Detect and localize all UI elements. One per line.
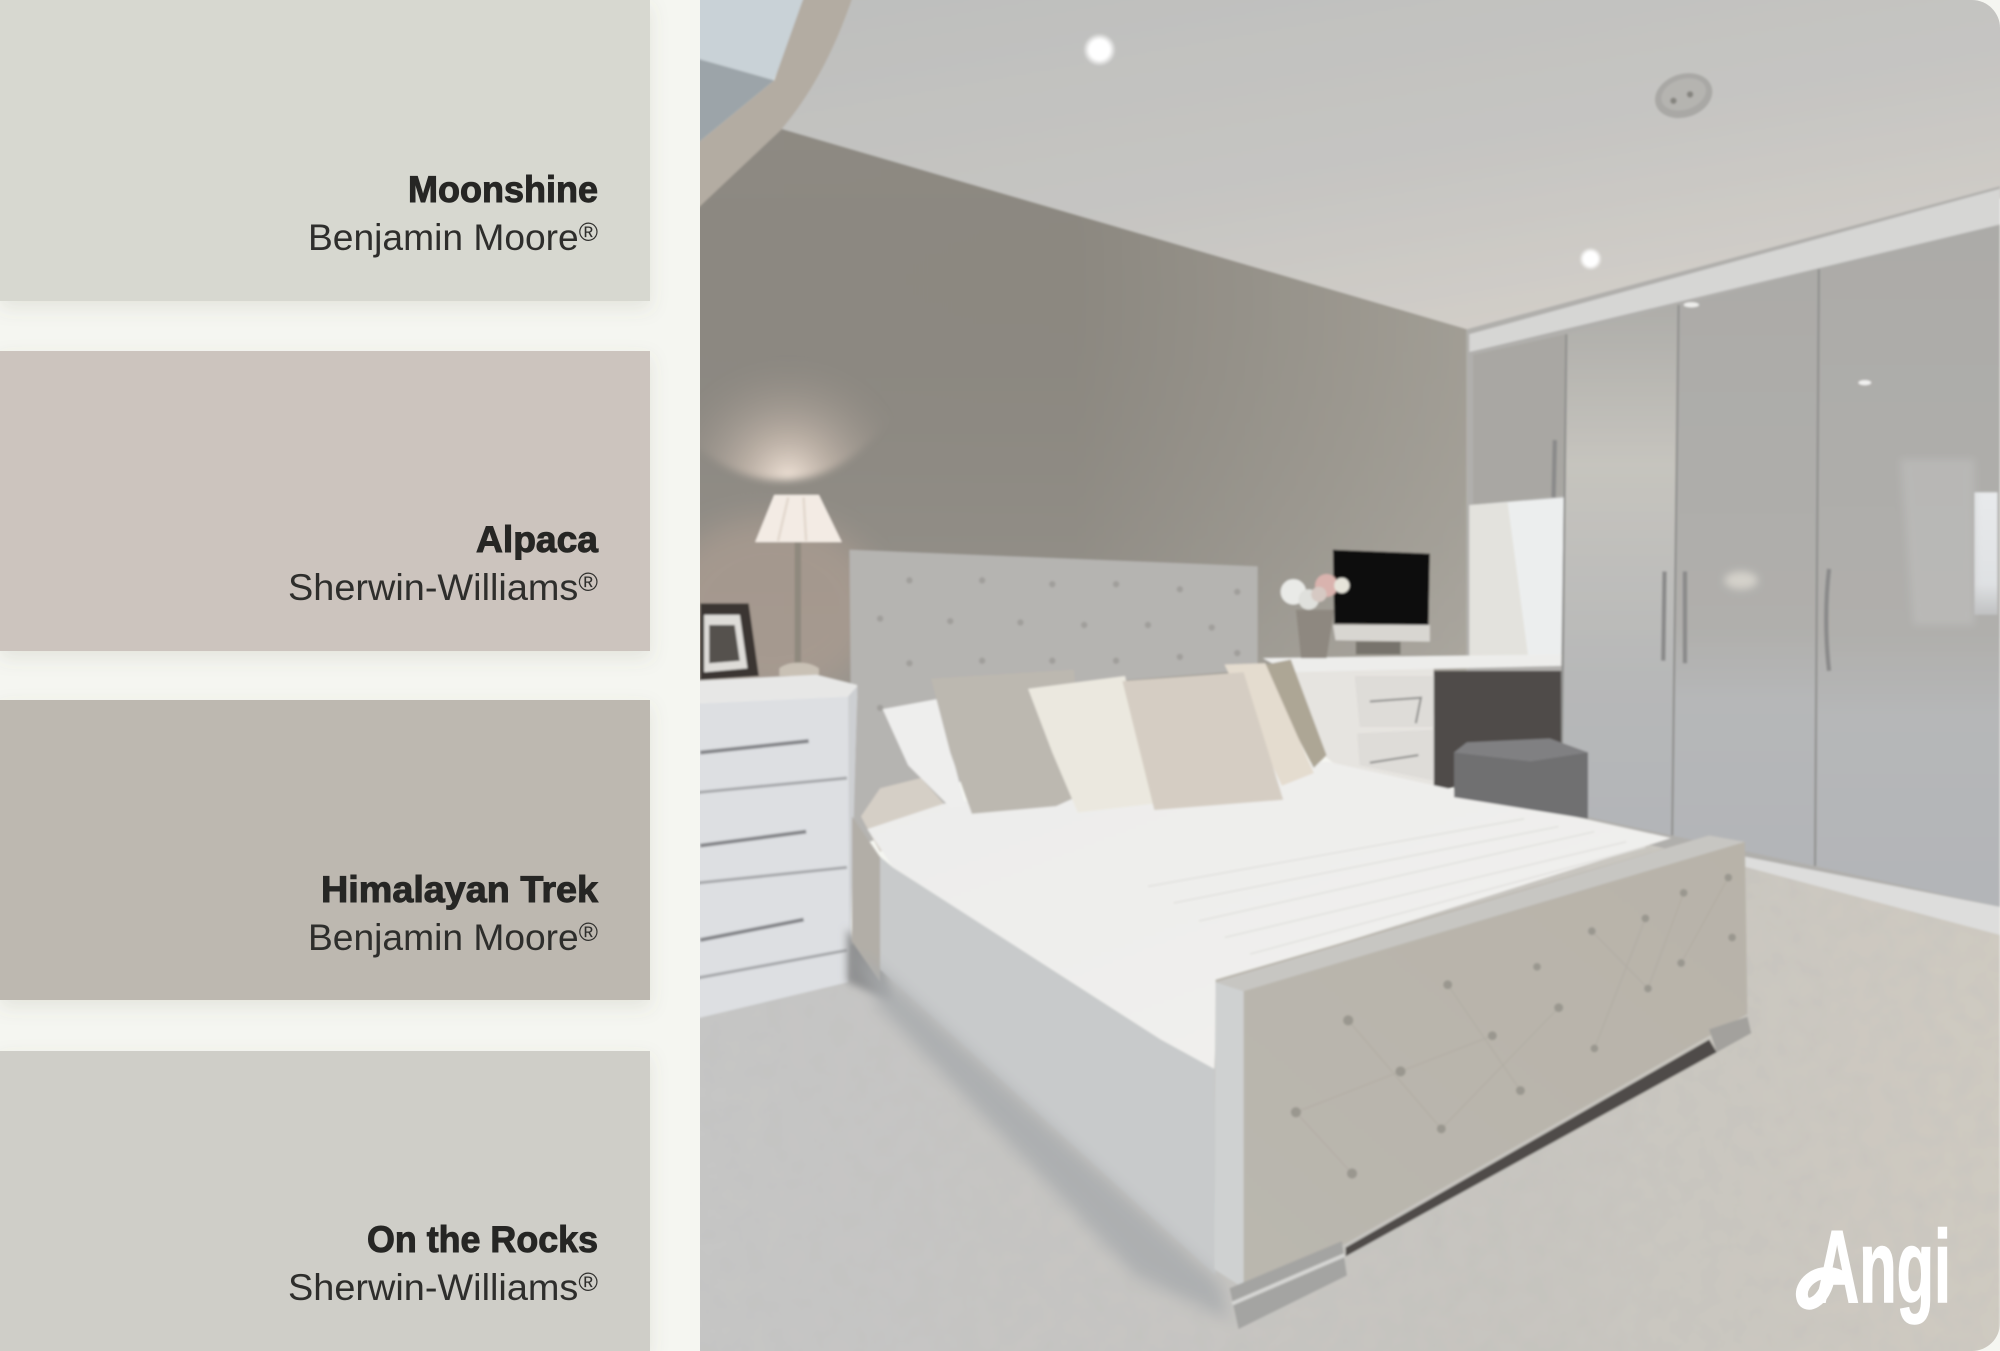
- swatch: On the Rocks: [0, 1051, 650, 1351]
- brand: Sherwin-Williams: Sherwin-Williams: [288, 567, 572, 608]
- duvet: [867, 761, 1671, 1069]
- footboard tufts: [1291, 874, 1736, 1179]
- brand: Benjamin Moore: Benjamin Moore: [308, 917, 577, 958]
- mattress edge: [861, 778, 944, 852]
- ottoman: [1454, 739, 1588, 819]
- swatch: Moonshine: [0, 0, 650, 301]
- footboard top edge: [1216, 835, 1745, 991]
- swatch: Alpaca: [0, 351, 650, 651]
- alcove: [1494, 496, 1565, 656]
- nightstand: [689, 675, 857, 1020]
- swatch: Himalayan Trek: [0, 700, 650, 1000]
- colour name: Alpaca: Alpaca: [476, 519, 598, 560]
- door reflection: [1974, 492, 1997, 615]
- back wall: [689, 129, 1467, 714]
- drawers: [1288, 666, 1434, 791]
- monitor: [1333, 550, 1430, 654]
- recessed ceiling lights: [1083, 33, 1602, 270]
- pillows: [883, 659, 1327, 814]
- colour name: Himalayan Trek: Himalayan Trek: [321, 869, 598, 910]
- door handles: [1554, 440, 1829, 671]
- shadow under footboard: [1346, 1040, 1717, 1256]
- headboard: [849, 550, 1258, 848]
- panel: colour swatches: [0, 0, 650, 1351]
- baseboard: [1735, 855, 2000, 937]
- brand: Sherwin-Williams: ®: [578, 1267, 598, 1297]
- under-desk recess: [1434, 671, 1561, 793]
- smoke detector: [1649, 66, 1718, 125]
- desktop: [1263, 654, 1561, 672]
- upper cabinet: [1473, 334, 1566, 505]
- wardrobe door 2: [1674, 677, 1815, 865]
- brand: Benjamin Moore: ®: [579, 217, 598, 247]
- flower vase: [1281, 574, 1349, 658]
- logo: Angi: [1802, 1209, 1951, 1324]
- colour name: Moonshine: Moonshine: [408, 169, 598, 210]
- brand: Sherwin-Williams: ®: [578, 567, 598, 597]
- wardrobe door 3: [1816, 692, 2000, 906]
- footboard creases: [1296, 878, 1728, 1173]
- brand: Sherwin-Williams: Sherwin-Williams: [288, 1267, 572, 1308]
- wardrobe: [1467, 186, 2000, 937]
- bed base side: [852, 816, 1216, 1276]
- carpet shadow by nightstand: [847, 929, 893, 1001]
- lamp: [755, 495, 842, 676]
- colour name: On the Rocks: On the Rocks: [367, 1219, 598, 1260]
- carpet shadow: [857, 950, 1231, 1320]
- desk: [1263, 654, 1561, 793]
- alcove shadow: [1469, 503, 1528, 658]
- lamp glow: [700, 388, 868, 677]
- brand: Benjamin Moore: ®: [579, 917, 598, 947]
- carpet: [689, 804, 2000, 1351]
- highlight: [1724, 571, 1758, 589]
- headboard tufts: [877, 577, 1240, 711]
- logo swash: [1802, 1273, 1840, 1304]
- skylight: [689, 0, 856, 217]
- footboard: [1214, 835, 1747, 1288]
- picture frame: [700, 603, 759, 680]
- bed feet: [1230, 1017, 1751, 1329]
- panel: bedroom scene: [663, 0, 2000, 1351]
- footboard side panel: [1214, 982, 1244, 1288]
- brand: Benjamin Moore: Benjamin Moore: [308, 217, 577, 258]
- wardrobe door 1: [1564, 373, 1676, 834]
- ceiling: [689, 0, 2000, 329]
- door seam lines: [1561, 269, 1819, 866]
- soft window reflection: [1904, 462, 1972, 621]
- soffit: [1469, 189, 2000, 352]
- duvet stripes: [1640, 847, 1644, 849]
